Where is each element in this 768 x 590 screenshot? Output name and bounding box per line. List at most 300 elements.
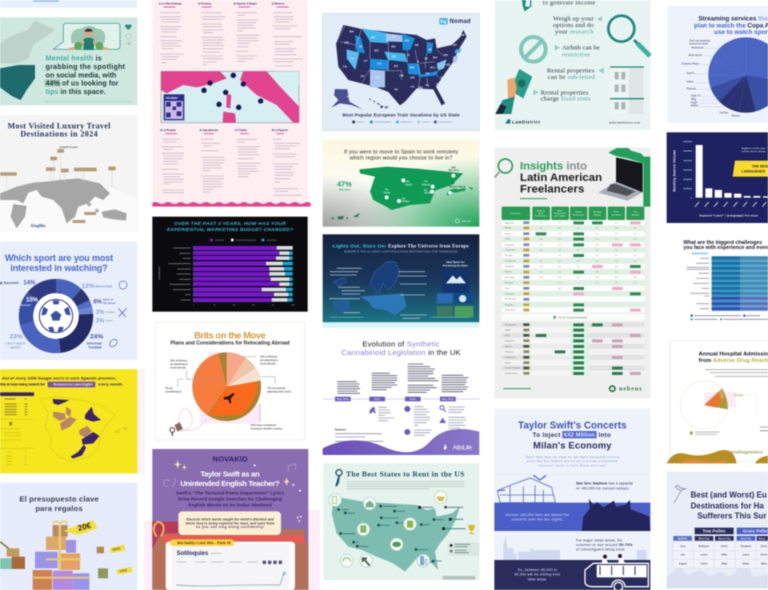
table rows world: Pakistan [505, 350, 514, 353]
legend [690, 431, 719, 435]
table rows Latin America: Costa Rica [505, 249, 516, 252]
logo: nebeus [461, 219, 472, 223]
stat: 47 percent not sure: 47% [337, 179, 352, 188]
icon: magnifier [495, 159, 512, 177]
callout labels: move abroad. [260, 362, 276, 365]
text: mental health headline [45, 56, 126, 96]
table [0, 392, 34, 464]
map: United States by favourite train route: MS [418, 85, 423, 89]
panel: experiential marketing budget chart [152, 217, 308, 312]
icon: luggage and dotted path [170, 408, 207, 436]
panel: annual hospital admissions [667, 341, 768, 463]
icon: green world map corner [608, 148, 650, 207]
map: United States by favourite train route: AZ [360, 74, 364, 78]
title [19, 495, 99, 513]
title: para regalos [35, 504, 83, 513]
chart card: Soliloquies [177, 551, 209, 557]
pollen table rows: Zurich [721, 545, 728, 548]
table header: Annual [632, 213, 639, 216]
column headers bottom: ⑥ Capodimonte [199, 129, 219, 132]
table rows Latin America: Chile [505, 239, 511, 241]
panel: best and worst destinations hay fever [667, 472, 768, 588]
table rows world: United Kingdom [505, 367, 521, 370]
info card: Discover which words caught the world's attention and [186, 518, 274, 522]
panel: partial infographic top left [0, 0, 137, 8]
background bands [152, 522, 308, 590]
title: Destinations in 2024 [20, 130, 98, 139]
pie labels: Sling [691, 99, 697, 101]
table header: Best [539, 212, 544, 215]
footer wave with logo [323, 429, 479, 455]
column headers top [159, 2, 285, 5]
timeline [323, 397, 479, 401]
map pins: Balearic Islands [449, 186, 467, 189]
title: OVER THE PAST 3 YEARS, HOW HAS YOUR [174, 221, 286, 227]
map: United States by favourite train route: GA [436, 82, 441, 86]
table rows Latin America: Colombia [505, 244, 515, 246]
pollen table header: Worst City [718, 537, 731, 540]
icon: hand with cash [495, 69, 532, 114]
text: mental health headline: tips in this space. [46, 89, 106, 96]
pie labels: Europeep Player [682, 62, 699, 65]
table header: per Capita [555, 215, 566, 218]
text: fixed rents: Rental properties [541, 89, 589, 96]
icon: meditating person card [53, 23, 120, 50]
map pins: 4% [451, 182, 456, 185]
map: United States by favourite train route: IA [407, 53, 411, 57]
data labels: 12% [81, 283, 95, 290]
separator row [502, 314, 644, 321]
pie labels: YouTube [719, 112, 729, 114]
map pins [383, 166, 467, 203]
intro text: at the San Siro Stadium and it's set to provide a substantial [527, 459, 618, 463]
side text [760, 427, 768, 431]
title text: this is how many search for [0, 382, 45, 387]
pollen table rows: Dublin [742, 562, 750, 565]
callout labels: 13% of Britons [260, 356, 278, 359]
data labels: the above [103, 301, 116, 305]
table rows Latin America: El Salvador [505, 298, 516, 301]
pie labels: Twitter [687, 81, 694, 84]
subtitle with highlight [533, 431, 611, 439]
legend [691, 315, 768, 320]
map: United States by favourite train route: KY [430, 66, 434, 70]
text: urban areas: common to see around 50-70% [576, 543, 633, 547]
data labels: 15% [26, 298, 39, 304]
data labels: Football [89, 346, 102, 350]
decorative sparkles [174, 460, 302, 522]
panel: synthetic cannabinoid legislation [323, 340, 479, 455]
subtitle: EUROPE'S TOP 10 LEAST LIGHT-POLLUTING DESTINATIONS FOR STARGAZING [344, 250, 458, 253]
icon: QR code [164, 94, 184, 120]
text columns bottom [162, 139, 302, 195]
icon: no-entry [404, 406, 410, 412]
title [180, 470, 280, 488]
row labels [687, 258, 709, 309]
illustration: tour bus [585, 554, 648, 590]
illustration: Milan skyline [503, 535, 647, 560]
stacked bar chart [159, 246, 295, 305]
map pins: 14% [451, 166, 457, 169]
pollen table rows: Lisbon [700, 554, 708, 557]
table header: Average [593, 211, 602, 214]
map: United States by favourite train route: TN [425, 71, 429, 75]
table rows Latin America: Venezuela [505, 310, 516, 312]
donut chart [26, 286, 86, 346]
text: sub-letted: Rental properties [547, 68, 595, 75]
footer wave with logo: AttoLife [453, 445, 472, 452]
panel: law district airbnb rental [495, 0, 650, 130]
pollen table rows: Zurich [761, 554, 768, 557]
text: weigh up your options: your research [555, 28, 594, 35]
data labels: 24% [90, 334, 103, 341]
table rows world: Egypt [505, 329, 511, 332]
table rows world: Bangladesh [505, 324, 517, 326]
title: Best (and Worst) Eu [691, 490, 767, 499]
intro text [525, 455, 620, 467]
panel: which sport are you interested in [0, 242, 137, 360]
title: Freelancers [520, 183, 584, 195]
map: United States by favourite train route: WA [349, 30, 355, 34]
icon: laptop [598, 157, 643, 201]
text: airbnb restrictive [562, 45, 600, 58]
callout labels [165, 356, 292, 430]
info card [178, 511, 281, 535]
track label [170, 539, 234, 546]
map: United States by favourite train route: VA [446, 63, 451, 67]
table header: Freelancers [535, 216, 548, 218]
arrow left [597, 16, 602, 22]
pie labels: Paramount+ [691, 46, 705, 49]
caption: Most Popular European Train Vacations by US State [342, 112, 460, 117]
table rows world [502, 323, 644, 375]
small note [742, 147, 766, 153]
title [520, 161, 602, 195]
bar chart [696, 145, 768, 198]
map: United States by favourite train route: AL [425, 83, 429, 87]
axis labels: Monthly Search Volume [673, 150, 677, 192]
timeline: 2013 [374, 397, 380, 401]
map pins: Alicante [424, 192, 433, 195]
logo: nomad [439, 18, 471, 25]
panel: most visited luxury travel destinations [0, 115, 137, 232]
timeline text above [337, 364, 468, 393]
title [691, 490, 767, 521]
info card: so you can sing along confidently! [196, 525, 264, 529]
map: United States by favourite train route: CA [343, 64, 348, 68]
text: airbnb restrictive: Airbnb can be [562, 45, 600, 52]
icon: top figure [522, 0, 531, 11]
map: United States by favourite train route: OK [399, 74, 405, 78]
table header: Rank of [537, 210, 545, 212]
map: United States by favourite train route: FL [442, 95, 446, 99]
table rows Latin America: Mexico [505, 272, 513, 274]
title [699, 352, 768, 364]
data labels: sports [10, 346, 21, 350]
text: San Siro capacity: San Siro Stadium has a capacity [576, 482, 633, 486]
callout labels: 7% are [165, 387, 174, 390]
text: San Siro capacity [576, 482, 633, 490]
map: United States by favourite train route: SC [441, 76, 446, 80]
title: Cannabinoid Legislation in the UK [341, 348, 462, 357]
stacked bars [712, 256, 768, 311]
map: United States by favourite train route: WI [415, 43, 419, 47]
arrow left [598, 68, 604, 74]
map of Europe [332, 262, 407, 315]
pollen table rows: Zurich [761, 545, 768, 548]
map: United States by favourite train route: ID [359, 45, 363, 49]
illustration: San Siro stadium [497, 475, 555, 503]
logo [455, 219, 472, 223]
navy band: other areas. [528, 577, 547, 581]
text: mental health headline: 44% of us looking for [46, 81, 119, 88]
map: United States by favourite train route [332, 23, 467, 109]
subtitle: Swift's "The Tortured Poets Department" Lyrics [176, 490, 285, 495]
timeline: 2016 [410, 397, 416, 401]
title [694, 16, 768, 36]
data labels: 3% [96, 310, 105, 316]
subtitle: English Words on its Debut Weekend [188, 503, 272, 508]
axis caption: Keyword "Learn" + [Language]: For most [699, 213, 758, 217]
callout labels: moving to another country. [251, 427, 283, 430]
title [683, 240, 768, 251]
panel: novakid taylor swift english teacher [152, 449, 308, 590]
data labels: 6% [93, 299, 103, 305]
pie chart [708, 37, 768, 113]
pie labels: Disney+ [732, 116, 741, 118]
small note: English is not the most [742, 147, 766, 150]
table header: Freelancers [573, 214, 586, 216]
value label: 15.6% [734, 393, 743, 397]
table rows world: Indonesia [505, 340, 515, 342]
title: The Best States to Rent in the US [346, 470, 464, 479]
panel: nomad train vacations map [323, 13, 479, 131]
map pins: 5% [385, 190, 388, 192]
icon: social buttons [125, 24, 132, 47]
callout labels: are planning to [170, 363, 188, 366]
table rows Latin America: Peru [505, 287, 510, 290]
destination labels [329, 268, 427, 318]
panel: move to Spain remote work [323, 139, 479, 227]
sources: Sources: [335, 428, 346, 432]
source badge [443, 576, 475, 580]
text: mental health headline: on social media, with [46, 72, 116, 79]
data labels: Other [106, 319, 113, 323]
footer [503, 386, 642, 393]
text: urban areas: of concertgoers being local. [576, 548, 625, 552]
table header: Tax [634, 212, 638, 214]
title text: Out of every 1000 Google users in each Spanish province, [2, 375, 116, 380]
logo: kingflike: Kingflike [31, 224, 46, 228]
table header: Price [614, 212, 620, 214]
callout labels: 7% not actively [267, 387, 286, 390]
title: Taylor Swift as an [200, 470, 260, 479]
text blocks below timeline [378, 407, 467, 435]
title: If you were to move to Spain to work remotely [344, 149, 458, 155]
decorative skyline [667, 550, 768, 588]
map: United States by favourite train route: IN [424, 56, 427, 60]
icon: warning [439, 418, 446, 423]
data labels [0, 280, 127, 350]
track label: But Daddy I Love Him - Track #6 [177, 541, 231, 545]
table header: Freelancers [554, 213, 567, 215]
map: United States by favourite train route: LA [410, 85, 415, 89]
map: United States by favourite train route: MT [371, 36, 376, 40]
map of Italian coast [161, 71, 299, 123]
map: dark teal highlighted country [0, 65, 35, 100]
panel: Italian destinations guide [152, 0, 311, 207]
table rows world: India [505, 335, 510, 337]
title: which region would you choose to live in? [350, 156, 452, 162]
logo: nomad: Nomad [450, 19, 471, 25]
price tag: 20 euros: 20€ [77, 521, 93, 533]
table rows Latin America: Brazil [505, 232, 511, 235]
table rows Latin America: Honduras [505, 265, 514, 268]
pollen table rows: Milan [761, 562, 768, 565]
intro text: economic boost to both Milan and Italy. [538, 463, 607, 467]
icon circles [329, 491, 447, 567]
pie chart [192, 352, 261, 421]
column headers bottom: ⑤ La Pergola [160, 129, 176, 132]
map: United States by favourite train route: HI [385, 105, 388, 109]
timeline: May 2023 [442, 397, 454, 401]
blue band with crowd [494, 499, 650, 531]
map: United States by favourite train route: NC [446, 70, 451, 74]
globe with continents [0, 178, 137, 232]
map pins: 4% [402, 198, 405, 200]
footer: nebeus [619, 386, 642, 393]
pie labels [682, 40, 741, 118]
table rows Latin America [502, 221, 644, 312]
navy band: So, between 48,000 to [518, 568, 557, 572]
table rows Latin America: Argentina [505, 221, 515, 224]
text columns top [160, 13, 303, 66]
pollen table header: Best City [741, 537, 752, 540]
data labels: Hockey [106, 310, 116, 314]
pie labels: ESPN+ [691, 106, 699, 108]
legend [352, 121, 452, 123]
subtitle: Plans and Considerations for Relocating Abroad [170, 341, 290, 347]
text: weigh up your options: options and do [553, 22, 594, 29]
pollen table rows: Budapest [741, 545, 752, 548]
map: United States by favourite train route: PA [444, 53, 449, 57]
state callouts [337, 505, 452, 562]
title: interested in watching? [10, 263, 108, 273]
title: EXPERIENTIAL MARKETING BUDGET CHANGED? [167, 227, 293, 233]
blue band with crowd: Around 165,000 fans will attend the [506, 513, 569, 517]
stat: 47 percent not sure: Not sure [339, 187, 350, 191]
icon: building [610, 67, 644, 114]
map: United States by favourite train route: MN [404, 39, 409, 43]
map pins: Madrid [405, 183, 413, 186]
map: United States by favourite train route: OR [344, 41, 350, 45]
panel: biggest challenges experience events [683, 240, 768, 320]
table header: Most [557, 209, 563, 212]
table rows Latin America: Bolivia [505, 228, 512, 230]
column headers bottom [160, 129, 288, 132]
table rows Latin America: Uruguay [505, 303, 514, 306]
price tag: 500 euros: 500€ [112, 547, 121, 552]
title: Which sport are you most [5, 253, 113, 263]
website: www.lawdistrict.com [608, 120, 640, 124]
title: Latin American [520, 172, 602, 184]
panel: learn language search volume [667, 132, 768, 223]
map pins: Seville [383, 192, 391, 194]
data labels: 23% [9, 334, 23, 341]
pie labels: Apple TV [691, 95, 701, 98]
map: United States by favourite train route: ND [392, 35, 397, 39]
pollen table header: MONTH [678, 537, 687, 540]
timeline: May 2009 [337, 397, 349, 401]
text: mental health headline: grabbing the spotlight [46, 64, 126, 71]
title [5, 253, 113, 273]
map: United States by favourite train route: MO [410, 66, 415, 70]
table rows Latin America: Panama [505, 282, 514, 284]
panel: lights out stars on [323, 234, 479, 328]
map: grey landmass [0, 21, 55, 63]
pie labels: DAZN [691, 101, 698, 104]
panel: el presupuesto clave para regalos [0, 483, 137, 590]
map: United States by favourite train route: KS [394, 64, 398, 68]
map: United States by favourite train route: NY [453, 43, 457, 47]
title: Brits on the Move [194, 330, 266, 340]
column headers top: ① La Villa Arbiango [159, 2, 182, 5]
table header: Countries [511, 212, 521, 215]
panel: streaming services copa [667, 6, 768, 123]
pollen table header: Tree Pollen [702, 529, 726, 534]
bottom mounds [667, 450, 768, 463]
table header: per Hour [612, 214, 621, 216]
intro text [705, 370, 768, 376]
title text: every month. [98, 382, 123, 387]
text: mental health headline: Mental health is [46, 56, 102, 63]
table rows Latin America: Paraguay [505, 292, 515, 295]
panel: best states to rent in the US [323, 463, 479, 580]
map pins: 7% [424, 182, 427, 184]
column headers bottom: ⑦ Il Gattia [235, 129, 247, 132]
map: United States by favourite train route: WY [374, 49, 379, 53]
text: urban areas: For major urban areas, it's [576, 539, 622, 543]
pie labels: fuboTV [687, 73, 695, 75]
text: urban areas [576, 539, 633, 552]
map pins: Barcelona [448, 169, 460, 172]
logo: #AesDiagnostics [728, 449, 763, 454]
navy band [494, 560, 650, 590]
icon: key [335, 470, 342, 487]
legend and trophy [448, 525, 479, 556]
callout: ideal spots: Ideal Spots for [446, 260, 465, 264]
map: United States by favourite train route: IL [417, 60, 420, 64]
callout labels: planning their move. [267, 390, 292, 393]
table rows Latin America: Guatemala [505, 260, 516, 263]
subtitle: Drive Record Google Searches for Challenging [178, 497, 282, 502]
map pins: 5% [424, 190, 427, 192]
title: Taylor Swift's Concerts [518, 420, 626, 431]
map: United States by favourite train route: MI [428, 48, 432, 52]
map: United States by favourite train route: CO [377, 61, 382, 65]
subtitle with highlight: Into [599, 433, 611, 439]
map: United States by favourite train route: ME [460, 33, 465, 37]
map: United States by favourite train route: NM [375, 76, 380, 80]
icon: QR code: YES-MENU [165, 98, 178, 100]
pollen table header: Best City [699, 537, 710, 540]
info card: where they're being explored the most, and learn them [185, 521, 275, 525]
icon: magnifying glass [608, 16, 650, 56]
table header: Active [575, 211, 583, 214]
table rows Latin America: Ecuador [505, 254, 513, 257]
title: Insights into [520, 161, 587, 173]
callout: most languages [733, 161, 768, 177]
